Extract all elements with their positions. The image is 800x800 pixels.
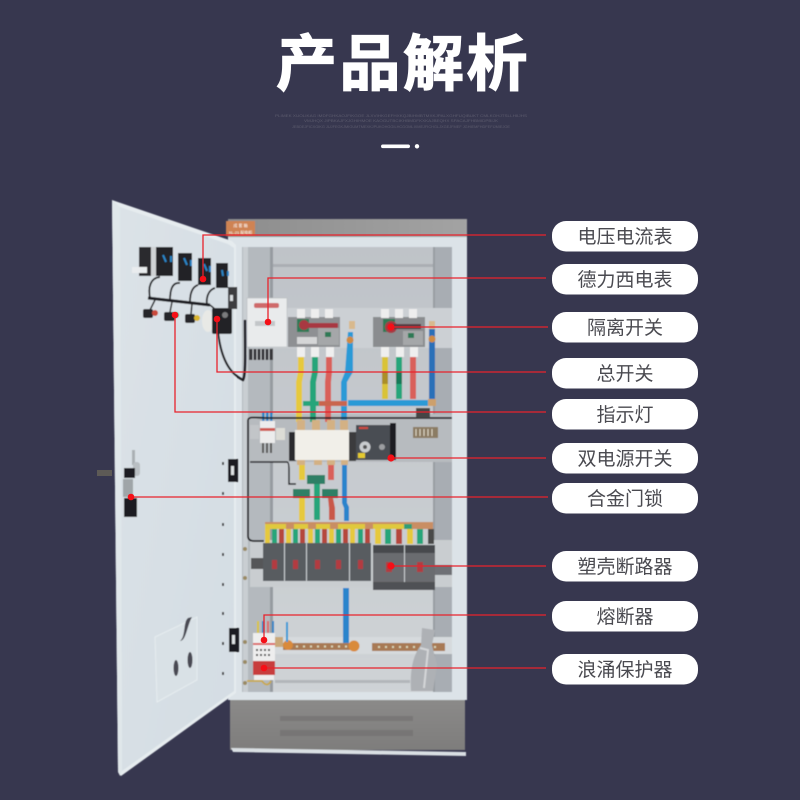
callout anchor dots <box>128 276 395 671</box>
subtitle fine print: JEBDEJFICXGIKG JUJFEGKJMIGUMTMEXKJPUKOHGGILHCGOMLIXMEJFICHGLJXGEJFMEF JGHIEMFHDFEFIJMIEJOE <box>292 124 510 129</box>
isolating switch right <box>373 309 425 347</box>
meter wiring harness <box>148 277 245 380</box>
label: 指示灯: 指示灯 <box>596 404 654 426</box>
door lock <box>123 450 140 517</box>
label: 德力西电表: 德力西电表 <box>577 269 673 291</box>
fuse <box>253 621 283 661</box>
cabinet <box>226 219 467 756</box>
label: 总开关 <box>552 358 698 388</box>
label: 指示灯 <box>552 399 698 430</box>
label: 浪涌保护器 <box>552 654 698 684</box>
spare parts bag <box>411 628 437 691</box>
label: 双电源开关 <box>552 443 698 474</box>
isolating switch left <box>288 309 340 347</box>
label: 德力西电表 <box>552 264 698 294</box>
label: 塑壳断路器: 塑壳断路器 <box>577 556 673 578</box>
distribution bar <box>265 522 434 544</box>
label: 合金门锁 <box>552 483 698 514</box>
door document pocket <box>155 617 197 702</box>
surge protector <box>247 661 275 684</box>
label: 塑壳断路器 <box>552 551 698 582</box>
subtitle fine print: VMJHQX JIPBKAJFXJGHIHMOE KAOGUTBCIKHBMDFKXKAJBEQHX SPACAJFHBMIDPBIJK <box>304 118 498 123</box>
label: 电压电流表 <box>552 221 698 252</box>
warning label <box>226 221 255 236</box>
moulded case circuit breakers <box>251 543 452 590</box>
indicator lights <box>143 309 200 323</box>
outer door handle stub <box>97 470 112 476</box>
voltage and current meters on door <box>132 247 228 288</box>
label: 隔离开关: 隔离开关 <box>587 317 663 339</box>
cabinet top strip <box>228 219 467 238</box>
cabinet base panel <box>230 700 466 756</box>
open door <box>112 200 245 776</box>
warning label: XL-21 配电柜 <box>229 229 252 235</box>
callout leader lines <box>131 235 548 668</box>
main switch <box>202 287 237 334</box>
subtitle fine print: PLIMEK XUOLIKAG IMDFGHKAOJFIKGOE JLXVIHKGEFHXKQJBIHMBTMXKJPALXGHFUQIBUKT CMLKOHJTSLLHIIJHS <box>275 113 527 118</box>
dual power transfer switch <box>289 420 396 461</box>
label: 浪涌保护器: 浪涌保护器 <box>577 659 673 681</box>
cabinet interior back <box>242 247 452 692</box>
copper busbars upper <box>296 321 436 422</box>
title: 产品解析 <box>276 30 530 98</box>
copper ground bars <box>283 622 445 652</box>
title divider dash and dot <box>381 144 419 148</box>
meter: Delixi electric meter <box>247 298 287 360</box>
label: 双电源开关: 双电源开关 <box>577 448 673 470</box>
label: 总开关: 总开关 <box>596 363 654 385</box>
label: 熔断器: 熔断器 <box>596 606 654 628</box>
label: 电压电流表: 电压电流表 <box>577 226 673 248</box>
busbars lower and current transformers <box>293 460 349 644</box>
hinges <box>228 459 239 652</box>
subtitle fine print <box>275 113 527 129</box>
warning label: 成 套 箱 <box>233 222 248 228</box>
label: 熔断器 <box>552 601 698 632</box>
cabinet white frame <box>228 237 467 700</box>
label: 隔离开关 <box>552 312 698 342</box>
label: 合金门锁: 合金门锁 <box>587 488 663 510</box>
small breakers and relay rail <box>248 408 452 541</box>
